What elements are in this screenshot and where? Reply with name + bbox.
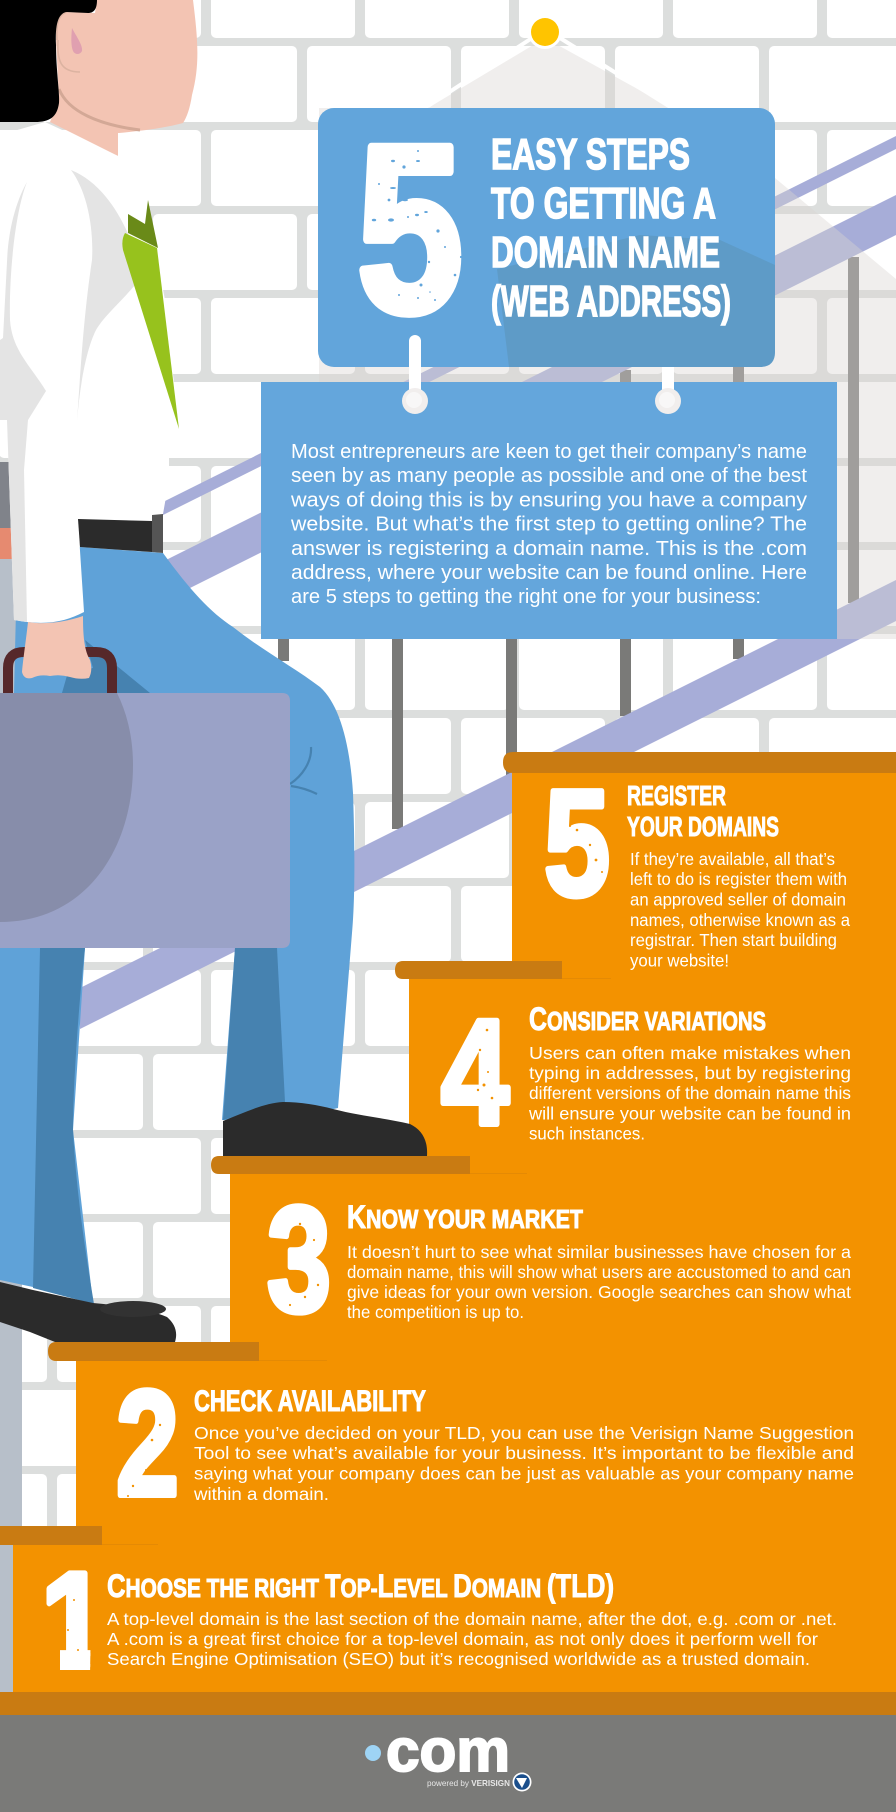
- step 5 numeral: 5: [544, 758, 610, 927]
- intro text: ways of doing this is by ensuring you have a company: [290, 490, 807, 512]
- step 5 heading: [627, 780, 779, 842]
- step 1 body: A top-level domain is the last section of the domain name, after the dot, e.g. .com or .net.: [107, 1609, 837, 1629]
- translucent sign shadow: [319, 38, 896, 639]
- intro text: address, where your website can be found online. Here: [291, 562, 807, 584]
- step 3 body: domain name, this will show what users are accustomed to and can: [347, 1262, 851, 1282]
- step 2 body: [193, 1423, 854, 1504]
- step 5 body: an approved seller of domain: [630, 890, 846, 910]
- intro text: website. But what’s the first step to getting online? The: [290, 514, 807, 536]
- belt: [78, 514, 163, 553]
- step 2: [48, 1342, 896, 1545]
- trousers: [0, 547, 354, 1304]
- step 5 body: [630, 849, 850, 970]
- logo: .com powered by Verisign: powered by VERISIGN: [427, 1778, 510, 1788]
- intro text: are 5 steps to getting the right one for your business:: [291, 586, 761, 608]
- stair handrails: [80, 136, 896, 1029]
- step 4 numeral: 4: [441, 988, 509, 1156]
- step 1 heading: CHOOSE THE RIGHT TOP-LEVEL DOMAIN (TLD): [107, 1568, 614, 1604]
- businessman figure: [0, 0, 427, 1342]
- step 3 body: the competition is up to.: [347, 1302, 524, 1322]
- intro panel: [261, 382, 837, 639]
- step 4 heading: CONSIDER VARIATIONS: [529, 1001, 766, 1037]
- step 3 body: give ideas for your own version. Google searches can show what: [347, 1282, 851, 1302]
- big numeral 5: 5: [357, 97, 463, 362]
- pin: [528, 15, 562, 49]
- hair: [0, 0, 97, 122]
- step 3: [211, 1156, 896, 1361]
- step 4 body: [528, 1043, 851, 1144]
- logo: .com powered by Verisign: [365, 1717, 532, 1792]
- step 2 body: saying what your company does can be just as valuable as your company name: [194, 1464, 854, 1484]
- step 3 body: [347, 1242, 851, 1322]
- intro text: [290, 441, 807, 608]
- briefcase: [0, 693, 290, 948]
- hand: [22, 616, 91, 679]
- step 2 body: Tool to see what’s available for your business. It’s important to be flexible and: [194, 1443, 854, 1463]
- step 1 numeral: 1: [41, 1544, 107, 1696]
- step 3 body: It doesn’t hurt to see what similar businesses have chosen for a: [347, 1242, 851, 1262]
- intro text: answer is registering a domain name. This is the .com: [291, 538, 807, 560]
- step 5 body: left to do is register them with: [630, 869, 847, 889]
- step 4 body: typing in addresses, but by registering: [529, 1063, 851, 1083]
- step 5 heading: YOUR DOMAINS: [627, 811, 779, 842]
- step 2 body: Once you’ve decided on your TLD, you can use the Verisign Name Suggestion: [194, 1423, 854, 1443]
- title text: TO GETTING A: [491, 179, 716, 228]
- step 5: [503, 752, 896, 979]
- step 2 numeral: 2: [116, 1359, 179, 1527]
- sign shadow: [497, 235, 775, 367]
- left background column: [0, 462, 22, 1692]
- step 1 body: Search Engine Optimisation (SEO) but it’s recognised worldwide as a trusted domain.: [107, 1649, 810, 1669]
- front shoe: [223, 1102, 427, 1156]
- step 2 body: within a domain.: [193, 1484, 329, 1504]
- step 3 numeral: 3: [267, 1175, 331, 1343]
- rear shoe: [0, 1282, 176, 1342]
- head: [0, 0, 197, 156]
- step 4 body: Users can often make mistakes when: [529, 1043, 851, 1063]
- step 1: [0, 1526, 896, 1696]
- numeral speckles: [67, 825, 603, 1651]
- intro text: Most entrepreneurs are keen to get their company’s name: [291, 441, 807, 463]
- briefcase handle: [8, 652, 112, 695]
- tie: [122, 200, 179, 429]
- step 5 body: your website!: [630, 950, 729, 970]
- right hook: [655, 367, 681, 414]
- hanging strings: [428, 38, 672, 108]
- step 2 heading: CHECK AVAILABILITY: [194, 1385, 426, 1418]
- intro text: seen by as many people as possible and one of the best: [291, 465, 807, 487]
- step 5 body: registrar. Then start building: [630, 930, 837, 950]
- stair balusters: [278, 257, 859, 829]
- step 3 heading: KNOW YOUR MARKET: [347, 1199, 583, 1235]
- title sign: [318, 97, 775, 367]
- title text: (WEB ADDRESS): [491, 277, 731, 326]
- step 4 body: will ensure your website can be found in: [528, 1104, 851, 1124]
- step 1 body: [107, 1609, 837, 1669]
- title text: DOMAIN NAME: [491, 228, 720, 277]
- step 5 body: If they’re available, all that’s: [630, 849, 835, 869]
- logo: .com powered by Verisign: com: [386, 1717, 510, 1784]
- step 5 body: names, otherwise known as a: [630, 910, 850, 930]
- step 4 body: different versions of the domain name this: [529, 1083, 851, 1103]
- step 5 heading: REGISTER: [627, 780, 726, 811]
- shirt: [0, 122, 179, 623]
- step 4: [395, 961, 896, 1173]
- title text: EASY STEPS: [491, 130, 690, 179]
- title text: [491, 130, 731, 326]
- base tread and footer: [0, 1692, 896, 1812]
- left hook: [402, 335, 428, 414]
- step 1 body: A .com is a great first choice for a top-level domain, as not only does it perform well for: [107, 1629, 818, 1649]
- step 4 body: such instances.: [529, 1124, 645, 1144]
